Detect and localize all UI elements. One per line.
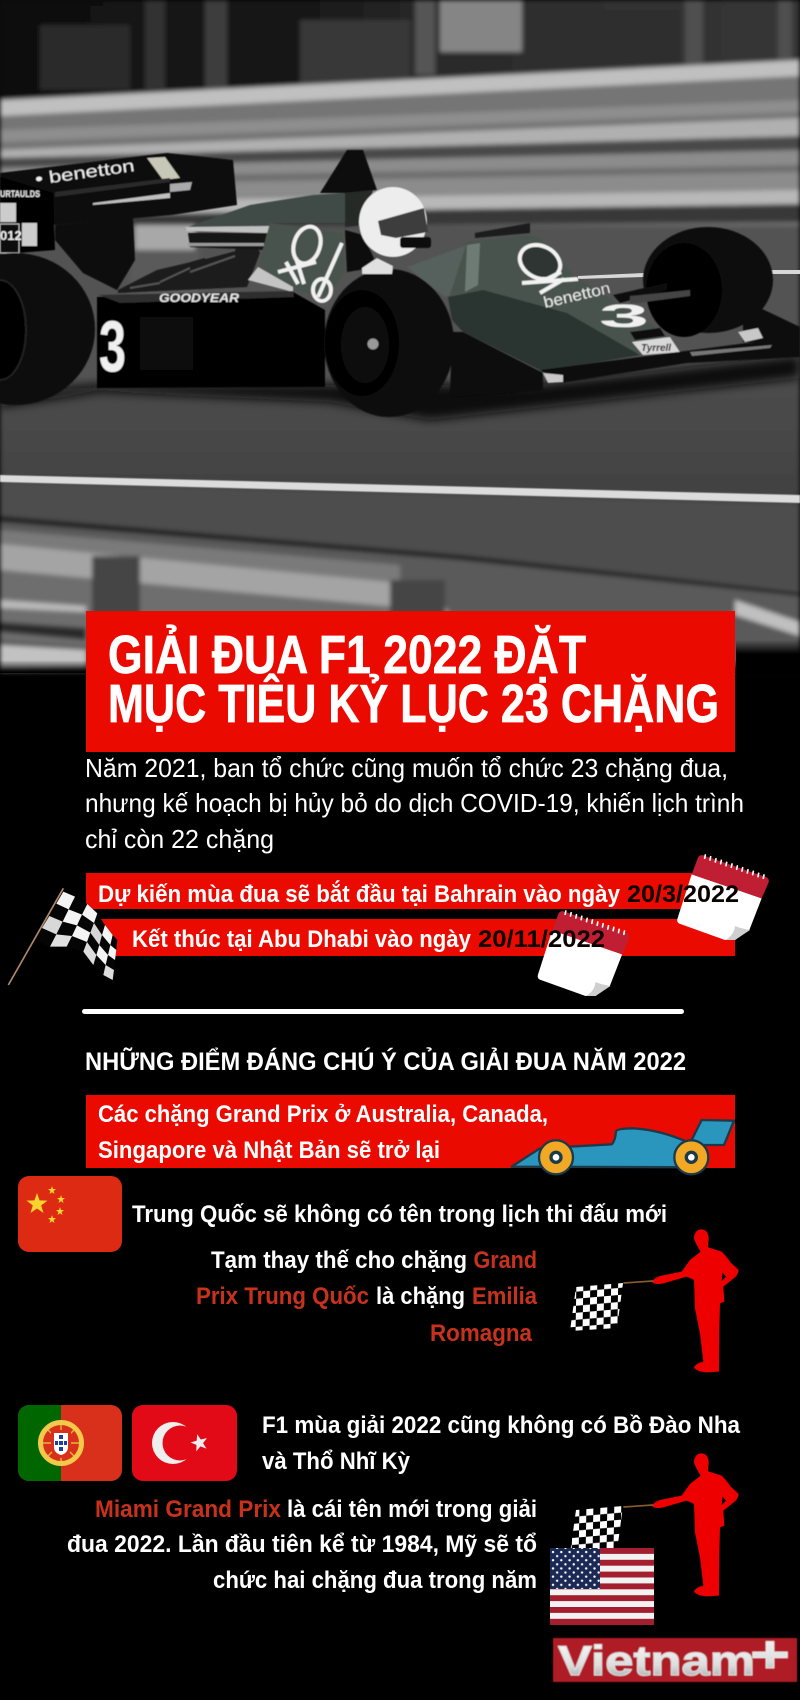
logo: Vietnam+ xyxy=(553,1626,797,1684)
photo: Formula 1 racing car on track xyxy=(0,0,800,676)
text: Portugal and Turkey absent xyxy=(262,1412,741,1475)
text: Emilia Romagna replacement: Emilia xyxy=(472,1283,538,1310)
text: Emilia Romagna replacement: Prix Trung Quốc xyxy=(196,1283,369,1310)
sticker text: 012: 012 xyxy=(0,228,22,243)
banner: end date bar xyxy=(101,919,735,956)
icon: calendar for end date xyxy=(538,911,629,996)
text: Emilia Romagna replacement: Romagna xyxy=(430,1320,533,1347)
sponsor text: Tyrrell: Tyrrell xyxy=(641,343,671,354)
start date text: 20/3/2022 xyxy=(627,881,739,908)
banner: start date bar xyxy=(86,873,735,909)
icon: Turkey flag xyxy=(132,1405,237,1481)
icon: calendar for start date xyxy=(677,855,769,940)
text: China not in calendar: Trung Quốc sẽ không có tên trong lịch thi đấu mới xyxy=(132,1201,667,1228)
sidepod with logo xyxy=(248,223,345,297)
text: Emilia Romagna replacement: Grand xyxy=(474,1247,537,1274)
rear wheel xyxy=(0,253,95,405)
sponsor text: benetton on wing: • benetton xyxy=(34,156,136,189)
intro paragraph: nhưng kế hoạch bị hủy bỏ do dịch COVID-19, khiến lịch trình xyxy=(85,788,744,818)
mid wheel xyxy=(324,269,454,417)
banner: returning Grand Prix: Các chặng Grand Prix ở Australia, Canada, xyxy=(98,1101,548,1128)
text: Emilia Romagna replacement: Tạm thay thế cho chặng xyxy=(211,1247,467,1274)
icon: checkered flag xyxy=(8,888,117,985)
front wing xyxy=(743,300,800,345)
sponsor text: benetton on nose: benetton xyxy=(542,280,612,312)
end date text: Kết thúc tại Abu Dhabi vào ngày xyxy=(132,926,472,953)
text: Emilia Romagna replacement: là chặng xyxy=(376,1283,465,1310)
banner: returning Grand Prix xyxy=(86,1095,735,1168)
text: Portugal and Turkey absent: F1 mùa giải 2022 cũng không có Bồ Đào Nha xyxy=(262,1412,741,1439)
text: Miami Grand Prix: Miami Grand Prix xyxy=(95,1496,282,1523)
roll hoop and cockpit xyxy=(320,150,377,193)
icon: race car xyxy=(512,1120,734,1174)
text: Miami Grand Prix: chức hai chặng đua trong năm xyxy=(213,1567,537,1594)
sponsor text: Courtaulds: URTAULDS xyxy=(0,189,40,200)
intro paragraph xyxy=(85,753,744,854)
icon: second checkered flag xyxy=(570,1506,623,1554)
nose xyxy=(407,245,467,297)
end date text: 20/11/2022 xyxy=(478,926,605,953)
icon: checkered flag held by marshal xyxy=(570,1283,623,1331)
nose logo xyxy=(514,239,578,293)
sponsor text: Goodyear: GOODYEAR xyxy=(159,291,239,305)
intro paragraph: Năm 2021, ban tổ chức cũng muốn tổ chức 23 chặng đua, xyxy=(85,753,728,783)
car number 3 on nose: 3 xyxy=(599,298,649,334)
logo: Vietnam+: Vietnam xyxy=(558,1637,755,1684)
title line 1: GIẢI ĐUA F1 2022 ĐẶT xyxy=(108,625,586,685)
text: Miami Grand Prix xyxy=(67,1496,537,1594)
icon: second marshal silhouette xyxy=(623,1453,739,1596)
engine cover xyxy=(185,190,373,233)
text: Miami Grand Prix: là cái tên mới trong giải xyxy=(287,1496,537,1523)
rear suspension xyxy=(55,218,135,290)
racing car xyxy=(0,150,800,417)
intro paragraph: chỉ còn 22 chặng xyxy=(85,824,274,854)
main body xyxy=(97,292,325,388)
photo background: blurred guard rails and track xyxy=(0,0,800,672)
front wheel and suspension xyxy=(643,227,773,333)
text: Portugal and Turkey absent: và Thổ Nhĩ Kỳ xyxy=(262,1448,411,1475)
car number 3 on side: 3 xyxy=(99,307,126,387)
icon: marshal silhouette xyxy=(623,1229,739,1372)
icon: USA flag xyxy=(550,1548,654,1625)
rear wing xyxy=(0,153,237,225)
icon: Portugal flag xyxy=(18,1405,122,1481)
driver helmet xyxy=(362,258,393,274)
start date text: Dự kiến mùa đua sẽ bắt đầu tại Bahrain vào ngày xyxy=(98,880,621,908)
title banner xyxy=(86,611,735,752)
text: Miami Grand Prix: đua 2022. Lần đầu tiên kể từ 1984, Mỹ sẽ tổ xyxy=(67,1531,537,1558)
track white line xyxy=(0,475,800,503)
logo: Vietnam+: + xyxy=(750,1626,790,1684)
heading: highlights: NHỮNG ĐIỂM ĐÁNG CHÚ Ý CỦA GIẢI ĐUA NĂM 2022 xyxy=(85,1046,686,1076)
text: Emilia Romagna replacement xyxy=(196,1247,538,1347)
icon: China flag xyxy=(18,1176,122,1252)
Tyrrell nose plate xyxy=(632,337,680,355)
banner: returning Grand Prix: Singapore và Nhật Bản sẽ trở lại xyxy=(98,1137,440,1164)
engine xyxy=(118,247,260,293)
